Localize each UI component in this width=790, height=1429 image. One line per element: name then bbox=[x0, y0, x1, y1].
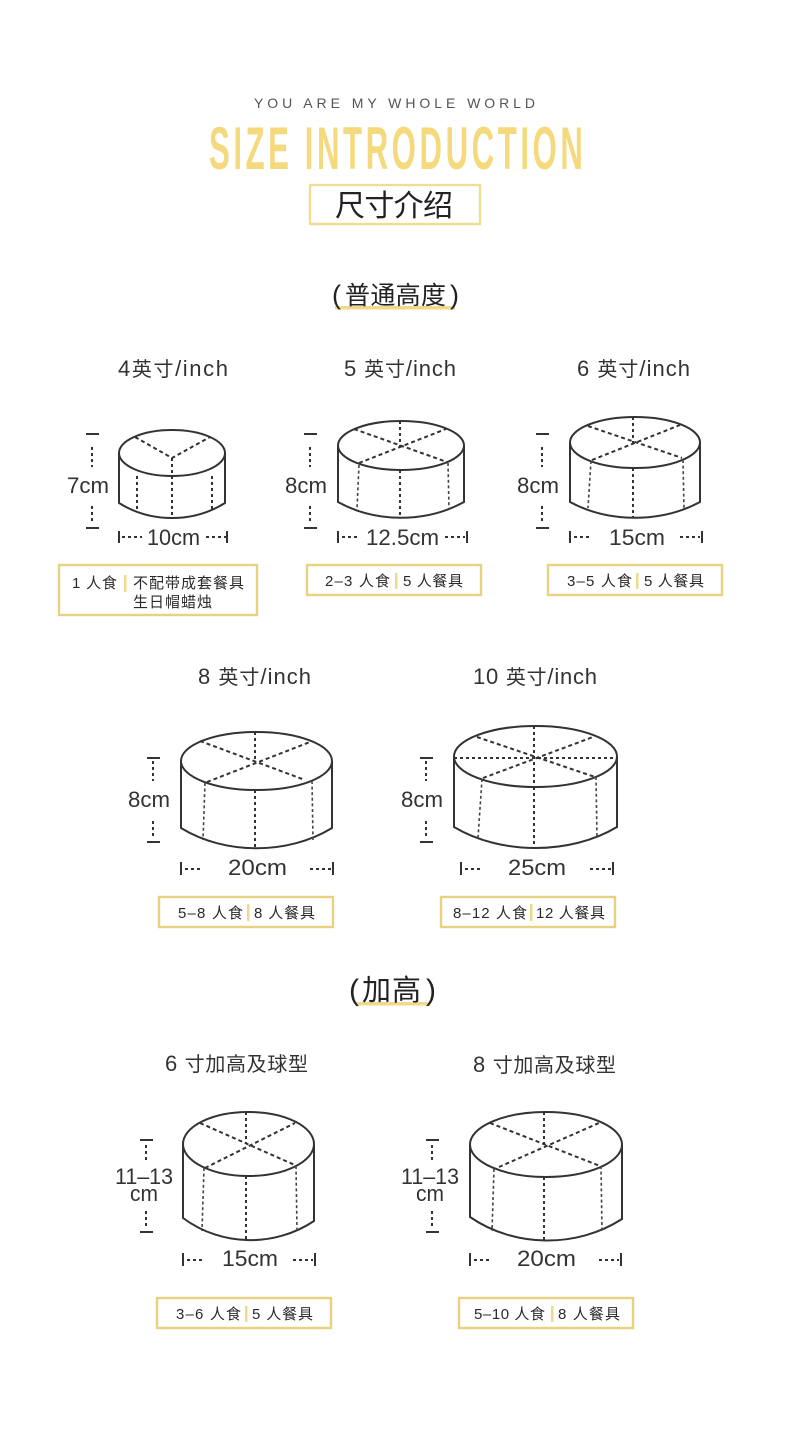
title: SIZE INTRODUCTION bbox=[209, 116, 583, 183]
heading: regular height: 普通高度 bbox=[345, 282, 446, 310]
panel: 6 inch tall bbox=[115, 1051, 331, 1328]
panel: 5 inch bbox=[285, 356, 481, 595]
servings box: 3–5 人食 bbox=[567, 573, 632, 590]
icon: 4 inch cake bbox=[119, 430, 225, 518]
heading: regular height: ) bbox=[450, 280, 459, 310]
servings box bbox=[548, 565, 722, 595]
servings box: 1 人食 bbox=[72, 575, 117, 592]
icon: 6 inch cake bbox=[570, 417, 700, 518]
servings box: 3–6 人食 bbox=[176, 1306, 241, 1323]
width dimension: 20cm bbox=[228, 855, 287, 880]
width dimension: 12.5cm bbox=[366, 525, 439, 550]
servings box: 8 人餐具 bbox=[254, 905, 315, 922]
height dimension: cm bbox=[130, 1181, 158, 1206]
servings box bbox=[459, 1298, 633, 1328]
servings box: 生日帽蜡烛 bbox=[133, 594, 212, 611]
servings box: 8 人餐具 bbox=[558, 1306, 620, 1323]
servings box: 2–3 人食 bbox=[325, 573, 390, 590]
servings box: 5 人餐具 bbox=[403, 573, 463, 590]
heading: regular height: ( bbox=[332, 280, 341, 310]
servings box bbox=[59, 565, 257, 615]
height dimension bbox=[67, 434, 109, 528]
width dimension: 25cm bbox=[508, 855, 566, 880]
width dimension: 15cm bbox=[609, 525, 665, 550]
servings box: 5 人餐具 bbox=[644, 573, 704, 590]
height dimension: 8cm bbox=[517, 473, 559, 498]
heading: tall: 加高 bbox=[362, 974, 421, 1007]
heading: 8 inch tall: 8 寸加高及球型 bbox=[473, 1052, 616, 1077]
heading: 10 inch: 10 英寸/inch bbox=[473, 664, 597, 689]
heading: 8 inch: 8 英寸/inch bbox=[198, 664, 311, 689]
panel: 4 inch bbox=[59, 356, 257, 615]
width dimension: 10cm bbox=[147, 525, 200, 550]
icon: 6 inch tall cake bbox=[183, 1112, 314, 1240]
servings box: 8–12 人食 bbox=[453, 905, 527, 922]
panel: 6 inch bbox=[517, 356, 722, 595]
heading: tall: ( bbox=[349, 974, 359, 1007]
width dimension bbox=[119, 525, 227, 550]
height dimension bbox=[285, 434, 327, 528]
width dimension bbox=[338, 525, 467, 550]
servings box bbox=[157, 1298, 331, 1328]
height dimension bbox=[401, 1140, 459, 1232]
height dimension bbox=[517, 434, 559, 528]
width dimension: 15cm bbox=[222, 1246, 278, 1271]
panel: 8 inch bbox=[128, 664, 333, 927]
heading: tall: ) bbox=[426, 974, 436, 1007]
heading: 6 inch tall: 6 寸加高及球型 bbox=[165, 1051, 308, 1076]
servings box: 5–8 人食 bbox=[178, 905, 243, 922]
width dimension bbox=[461, 855, 613, 880]
height dimension: 7cm bbox=[67, 473, 109, 498]
heading: 5 inch: 5 英寸/inch bbox=[344, 356, 456, 381]
tagline: YOU ARE MY WHOLE WORLD bbox=[254, 95, 535, 111]
servings box bbox=[307, 565, 481, 595]
height dimension bbox=[128, 758, 170, 842]
servings box bbox=[441, 897, 615, 927]
height dimension: 8cm bbox=[401, 787, 443, 812]
width dimension bbox=[181, 855, 333, 880]
subtitle box bbox=[310, 185, 480, 224]
width dimension: 20cm bbox=[517, 1246, 576, 1271]
icon: 8 inch cake bbox=[181, 732, 332, 848]
heading: 4 inch: 4英寸/inch bbox=[118, 356, 228, 381]
icon: 10 inch cake bbox=[454, 726, 617, 848]
height dimension: cm bbox=[416, 1181, 444, 1206]
panel: 8 inch tall bbox=[401, 1052, 633, 1328]
height dimension: 11–13 bbox=[115, 1164, 173, 1189]
height dimension bbox=[401, 758, 443, 842]
servings box: 5–10 人食 bbox=[474, 1306, 545, 1323]
height dimension bbox=[115, 1140, 173, 1232]
subtitle box: 尺寸介绍 bbox=[335, 190, 453, 223]
height dimension: 8cm bbox=[285, 473, 327, 498]
panel: 10 inch bbox=[401, 664, 617, 927]
servings box bbox=[159, 897, 333, 927]
width dimension bbox=[570, 525, 702, 550]
servings box: 不配带成套餐具 bbox=[133, 575, 244, 592]
icon: 8 inch tall cake bbox=[470, 1112, 622, 1241]
servings box: 5 人餐具 bbox=[252, 1306, 313, 1323]
height dimension: 8cm bbox=[128, 787, 170, 812]
heading: 6 inch: 6 英寸/inch bbox=[577, 356, 690, 381]
servings box: 12 人餐具 bbox=[536, 905, 605, 922]
width dimension bbox=[470, 1246, 621, 1271]
width dimension bbox=[183, 1246, 315, 1271]
heading: tall bbox=[349, 974, 436, 1007]
height dimension: 11–13 bbox=[401, 1164, 459, 1189]
icon: 5 inch cake bbox=[338, 421, 464, 518]
